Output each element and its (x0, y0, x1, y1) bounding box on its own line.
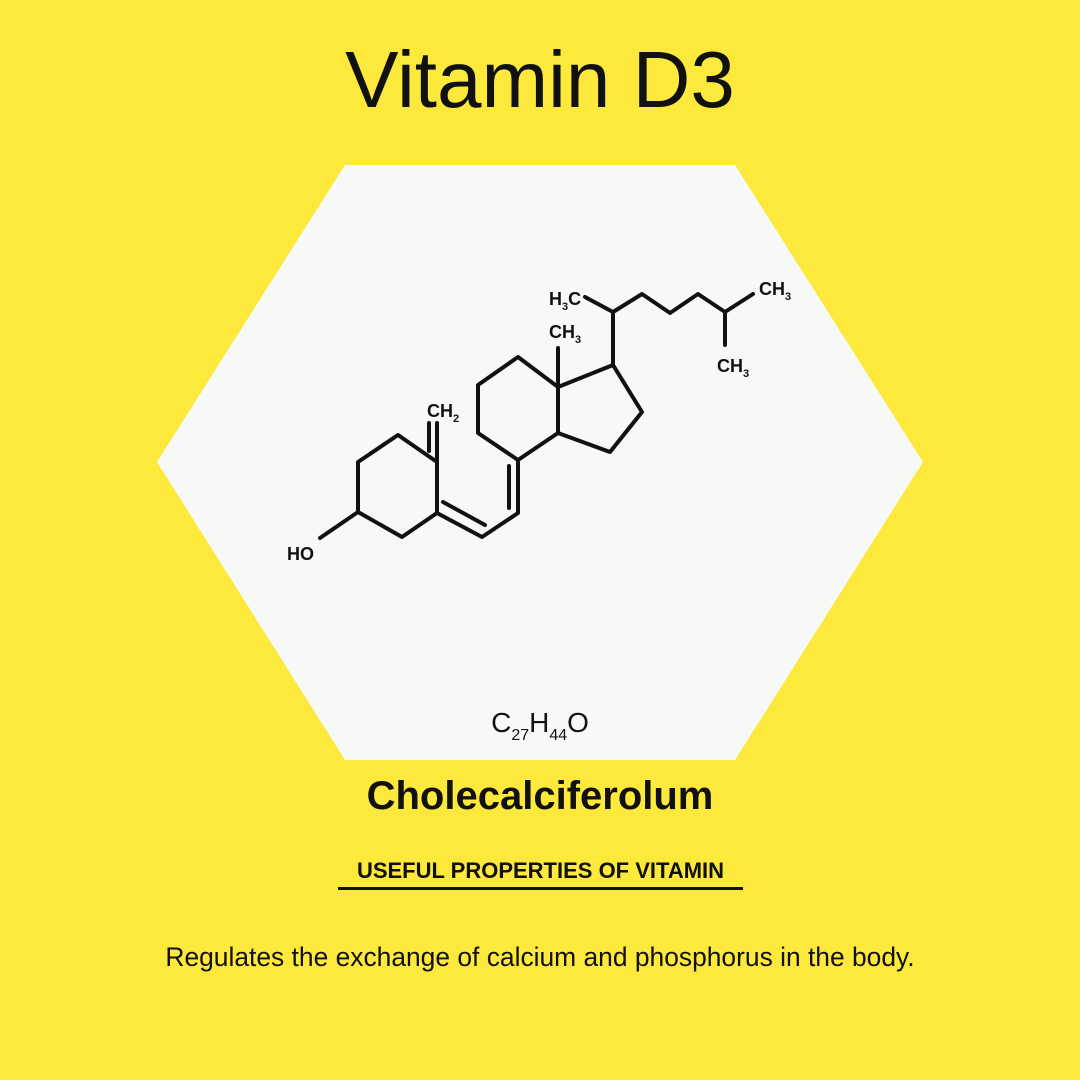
panel: hexagon with molecule: 3 (785, 291, 791, 303)
chart: structural formula (320, 294, 753, 538)
panel: hexagon with molecule: 2 (453, 413, 459, 425)
text: molecular formula: H (529, 707, 549, 738)
panel: hexagon with molecule: CH (549, 322, 575, 342)
panel: hexagon with molecule: CH (759, 279, 785, 299)
text: molecular formula: C (491, 707, 511, 738)
panel: hexagon with molecule: C (568, 289, 581, 309)
title: Vitamin D3 (345, 35, 735, 124)
text: molecular formula: 44 (549, 727, 567, 744)
text block: description: Regulates the exchange of calcium and phosphorus in the body. (165, 942, 915, 972)
panel: hexagon with molecule: CH (717, 356, 743, 376)
panel: hexagon with molecule: H (549, 289, 562, 309)
subheading: useful properties: USEFUL PROPERTIES OF VITAMIN (357, 858, 724, 883)
text: molecular formula: O (567, 707, 589, 738)
panel: hexagon with molecule: 3 (575, 334, 581, 346)
text: molecular formula: 27 (511, 727, 529, 744)
panel: hexagon with molecule: HO (287, 544, 314, 564)
panel: hexagon with molecule: 3 (562, 301, 568, 313)
heading: Cholecalciferolum: Cholecalciferolum (367, 774, 713, 818)
panel: hexagon with molecule: CH (427, 401, 453, 421)
panel: hexagon with molecule: 3 (743, 368, 749, 380)
